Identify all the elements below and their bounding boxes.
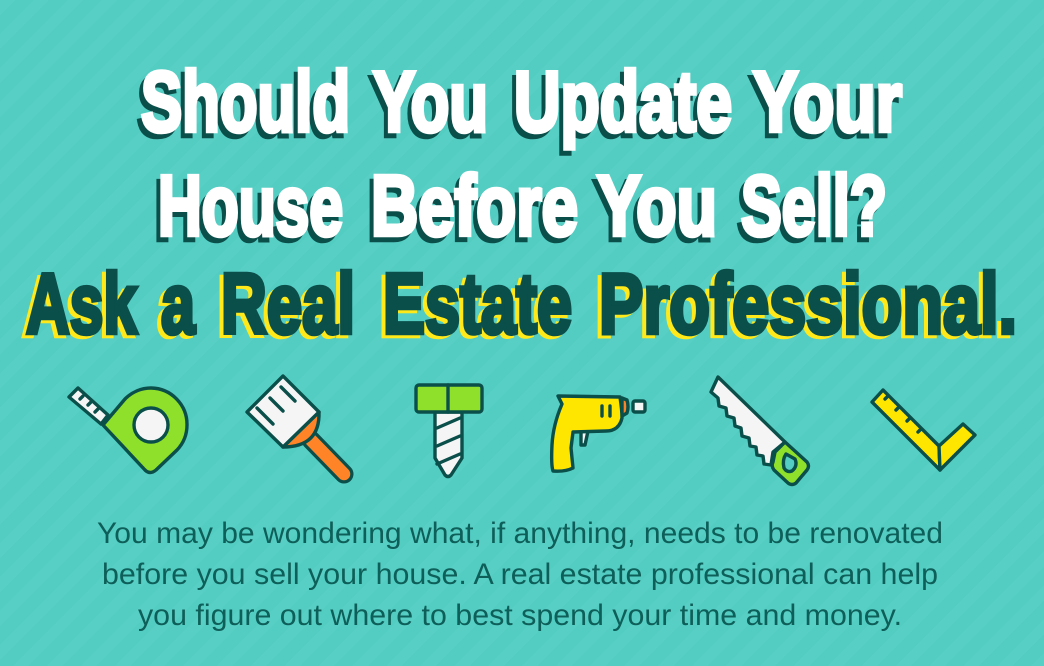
title line 3: Ask <box>22 260 134 355</box>
title line 2: Before <box>371 159 578 254</box>
icon: paint brush <box>247 376 344 474</box>
title line 2: Sell? <box>737 164 883 259</box>
title line 1: Your <box>749 60 898 155</box>
title line 2: Before <box>367 164 574 259</box>
title line 2: You <box>593 164 713 259</box>
title line 3: Ask <box>26 257 138 352</box>
title line 2: You <box>597 159 717 254</box>
icon: bolt <box>416 385 482 476</box>
title line 1: Should <box>141 55 350 150</box>
title line 2: House <box>154 164 339 259</box>
title line 3: Real <box>217 260 351 355</box>
title line 3: a <box>157 260 192 355</box>
title line 3: Estate <box>379 260 568 355</box>
icon: drill <box>552 396 645 471</box>
title line 3: a <box>161 257 196 352</box>
body text: you figure out where to best spend your time and money. <box>138 599 902 632</box>
title line 3: Estate <box>383 257 572 352</box>
title line 2: House <box>158 159 343 254</box>
title line 1 <box>137 55 902 155</box>
title line 2: Sell? <box>741 159 887 254</box>
body text: before you sell your house. A real estate professional can help <box>102 558 938 591</box>
title <box>22 55 1017 355</box>
title line 3 <box>22 257 1017 355</box>
icon: tape measure <box>69 388 187 472</box>
title line 1: Your <box>753 55 902 150</box>
body text: You may be wondering what, if anything, needs to be renovated <box>97 517 943 550</box>
title line 1: You <box>369 60 484 155</box>
title line 1: Update <box>510 60 728 155</box>
title line 1: You <box>373 55 488 150</box>
icon: carpenter square <box>872 390 975 470</box>
title line 3: Real <box>221 257 355 352</box>
icon: saw <box>711 377 808 484</box>
body text <box>97 517 943 632</box>
title line 1: Update <box>514 55 732 150</box>
title line 1: Should <box>137 60 346 155</box>
title line 2 <box>154 159 887 259</box>
